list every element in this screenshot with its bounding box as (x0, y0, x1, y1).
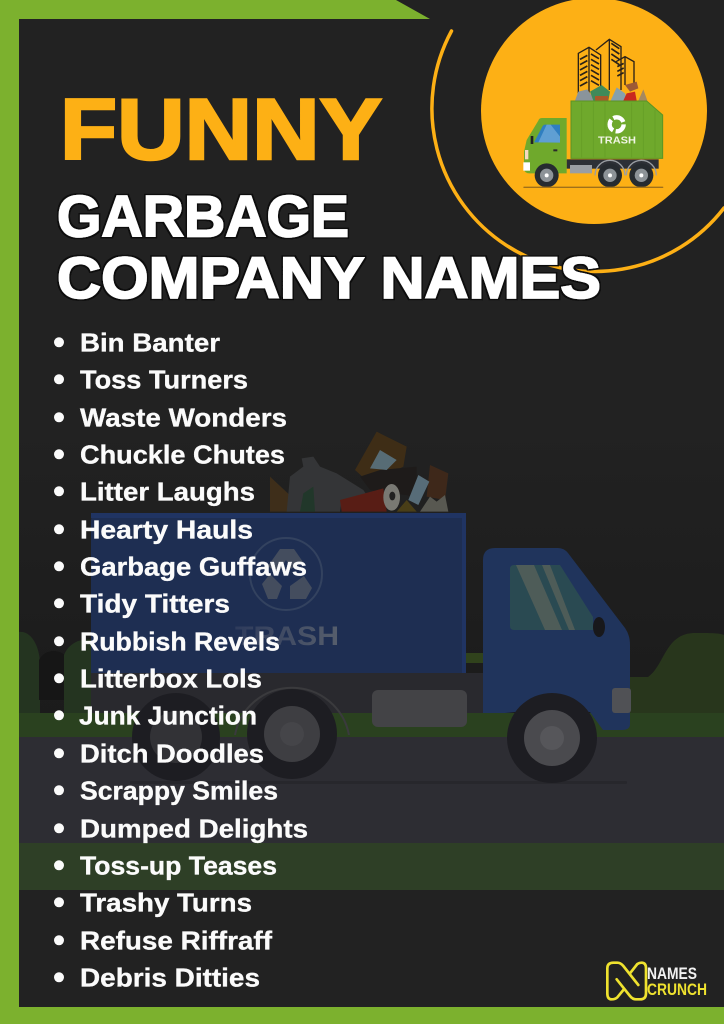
list of names: Ditch Doodles (80, 738, 264, 768)
trash label: TRASH (598, 136, 636, 147)
background hills (19, 632, 724, 713)
mirror (531, 136, 533, 144)
logo text: CRUNCH: CRUNCH (647, 981, 707, 999)
city buildings (578, 39, 634, 93)
cargo box (571, 101, 663, 158)
night sky backdrop (19, 420, 724, 720)
truck cargo box (91, 513, 466, 673)
road (19, 737, 724, 843)
ground line (523, 187, 663, 188)
recycling emblem (250, 538, 322, 610)
title: GARBAGE: GARBAGE (57, 184, 349, 250)
cab window (534, 125, 560, 143)
truck chassis (91, 673, 486, 713)
road shadow (130, 781, 627, 784)
logo: Names Crunch (607, 963, 707, 999)
list of names: Debris Ditties (80, 962, 260, 992)
yellow circle badge (481, 0, 707, 224)
wheels (535, 163, 653, 187)
list of names: Dumped Delights (80, 813, 308, 843)
list of names: Bin Banter (80, 327, 220, 357)
logo mark (607, 963, 646, 999)
icon: green garbage truck (523, 39, 663, 188)
list of names: Tidy Titters (80, 588, 230, 618)
bullets (54, 337, 64, 982)
list of names: Waste Wonders (80, 402, 287, 432)
list of names: Rubbish Revels (80, 626, 280, 656)
list of names: Toss Turners (80, 364, 248, 394)
headlights (523, 162, 530, 171)
bumper step (372, 690, 467, 727)
logo text: NAMES: NAMES (647, 964, 697, 983)
list of names: Hearty Hauls (80, 514, 253, 544)
garbage on truck (575, 82, 647, 101)
list of names: Chuckle Chutes (80, 439, 285, 469)
background grass (19, 713, 724, 738)
lower grass band (19, 843, 724, 890)
chassis (567, 159, 659, 169)
list of names: Refuse Riffraff (80, 925, 272, 955)
truck label: TRASH (235, 621, 339, 651)
garbage pile (270, 432, 448, 512)
background scene: dimmed truck on road (19, 420, 724, 890)
wheel arch (235, 688, 349, 735)
door handle (553, 149, 557, 151)
headlight (612, 688, 631, 713)
list of names: Litterbox Lols (80, 663, 262, 693)
decorative ring (432, 31, 724, 271)
title: FUNNY: FUNNY (60, 82, 382, 178)
list of names: Scrappy Smiles (80, 775, 278, 805)
truck cab (483, 548, 630, 730)
cab window (510, 565, 593, 630)
list of names: Toss-up Teases (80, 850, 277, 880)
list of names: Garbage Guffaws (80, 551, 307, 581)
list of names (54, 327, 308, 992)
list of names: Junk Junction (79, 700, 257, 730)
wheels (132, 689, 597, 783)
cab (524, 118, 567, 173)
list of names: Trashy Turns (80, 887, 252, 917)
list of names: Litter Laughs (80, 476, 255, 506)
mirror (593, 617, 605, 637)
title: COMPANY NAMES: COMPANY NAMES (57, 246, 601, 311)
recycle icon (610, 117, 624, 131)
